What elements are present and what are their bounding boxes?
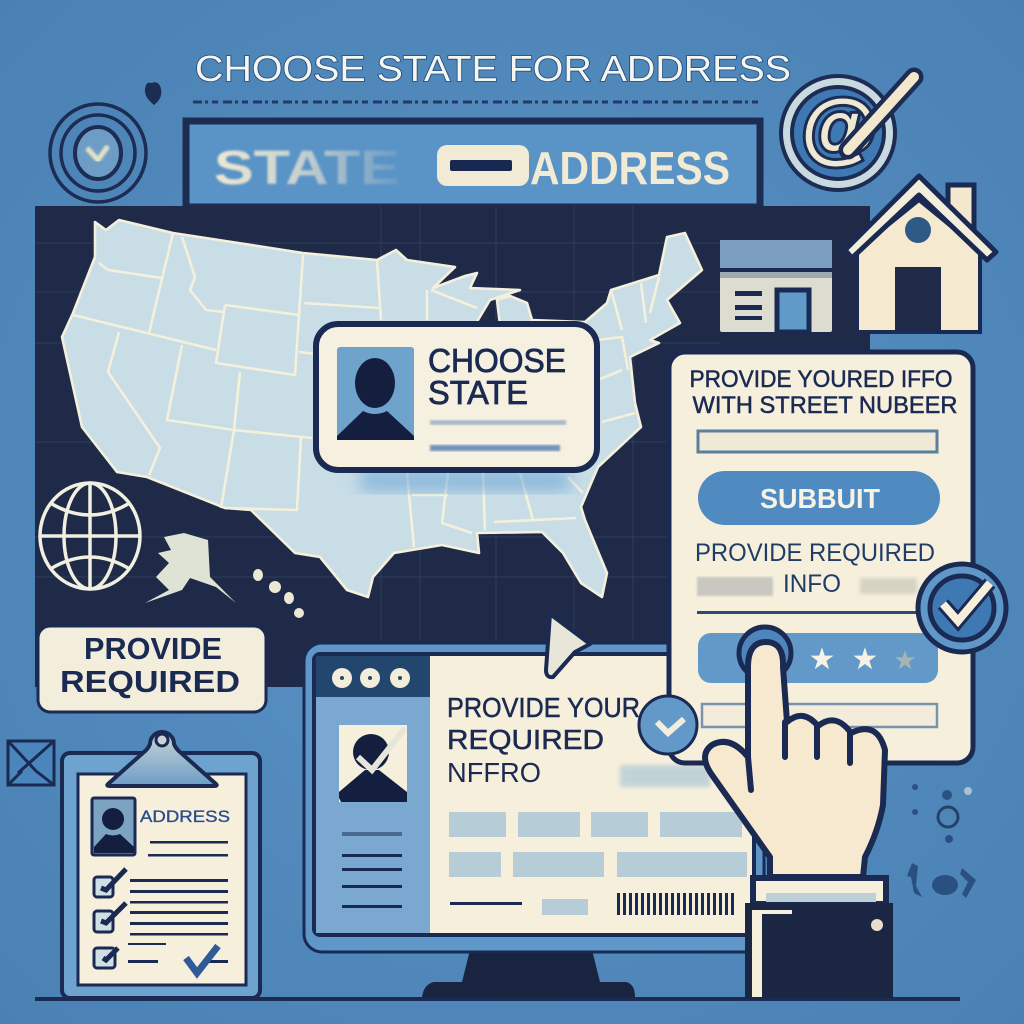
- baseline: [35, 997, 960, 1001]
- header bar: state address: ADDRESS: [530, 142, 730, 194]
- icon: small check badge: [639, 696, 697, 754]
- panel: form: PROVIDE YOURED IFFO: [690, 366, 952, 393]
- panel: monitor: [304, 643, 764, 952]
- map: Hawaii dots: [253, 569, 304, 618]
- button: rating bar: [698, 633, 938, 683]
- icon: cursor arrow: [546, 614, 590, 677]
- title underline dots: [193, 100, 762, 104]
- callout: choose state: [316, 324, 597, 470]
- callout: provide required: REQUIRED: [60, 664, 240, 699]
- icon: target seal: [50, 104, 146, 202]
- button: rating bar: ★: [852, 643, 878, 676]
- decorative marks: [907, 784, 976, 898]
- button: submit: [698, 471, 940, 525]
- map grid: [35, 206, 720, 640]
- callout shadow: [360, 468, 570, 492]
- panel: clipboard: [62, 732, 260, 998]
- button: rating bar: ★: [893, 645, 917, 675]
- icon: store front: [720, 240, 832, 332]
- map: United States: [62, 220, 702, 597]
- button: rating bar: ★: [809, 643, 835, 676]
- icon: envelope: [8, 741, 54, 785]
- header bar: state address: STATE: [214, 142, 400, 195]
- panel: monitor: PROVIDE YOUR: [447, 692, 640, 723]
- title: CHOOSE STATE FOR ADDRESS: [195, 48, 791, 89]
- monitor stand: [422, 950, 635, 997]
- panel: form: [669, 352, 973, 763]
- panel: monitor: REQUIRED: [447, 724, 604, 755]
- icon: globe: [40, 483, 140, 589]
- panel: clipboard: ADDRESS: [140, 807, 230, 826]
- jacket sleeve: [745, 903, 893, 998]
- icon: check badge: [918, 564, 1006, 652]
- icon: at sign with check: @: [800, 84, 876, 172]
- panel: form: INFO: [783, 570, 841, 598]
- button: submit: SUBBUIT: [760, 483, 880, 514]
- callout: provide required: [38, 626, 266, 712]
- panel: form: WITH STREET NUBEER: [692, 392, 958, 419]
- callout: choose state: CHOOSE: [428, 342, 566, 379]
- icon: pointing hand: [705, 627, 893, 998]
- panel: dark map background: [35, 206, 870, 687]
- icon: at sign with check: [781, 76, 914, 190]
- panel: form: PROVIDE REQUIRED: [695, 539, 935, 567]
- shirt cuff: [753, 878, 886, 904]
- panel: monitor: NFFRO: [447, 757, 541, 788]
- icon: house: [845, 176, 996, 332]
- icon: profile picture: [337, 347, 414, 440]
- blot mark: [145, 82, 161, 105]
- callout: provide required: PROVIDE: [84, 631, 222, 666]
- map: Alaska: [145, 533, 236, 603]
- header bar: state address: [186, 121, 760, 207]
- callout: choose state: STATE: [428, 374, 528, 411]
